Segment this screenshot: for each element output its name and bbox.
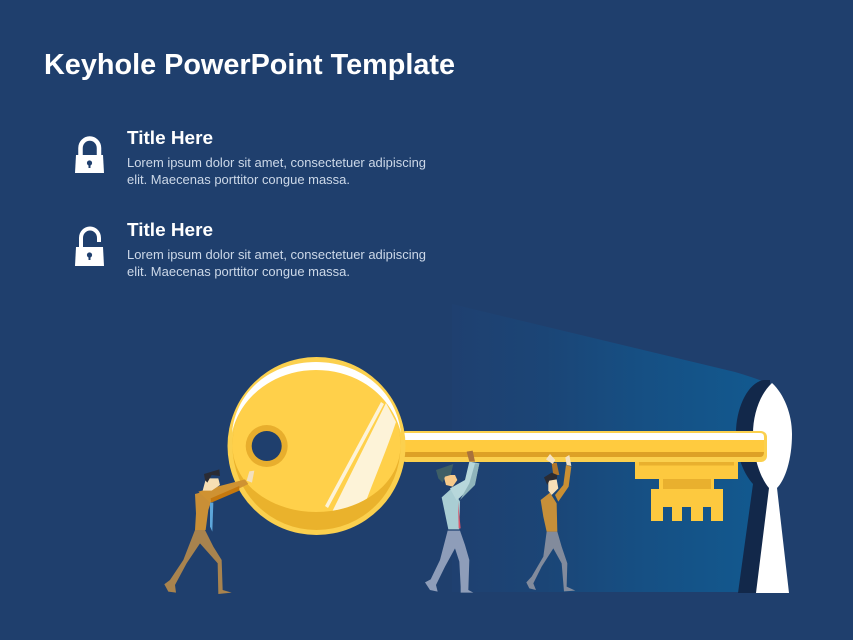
item 2 body text: elit. Maecenas porttitor congue massa. bbox=[127, 265, 350, 279]
key shaft bbox=[400, 431, 767, 462]
item 1 body text bbox=[127, 156, 426, 187]
person lifting the key, right bbox=[526, 454, 575, 591]
key ring hole bbox=[246, 425, 288, 467]
item 2 heading: Title Here bbox=[127, 220, 213, 240]
item 1: locked bbox=[75, 128, 426, 187]
keyhole bbox=[736, 380, 792, 593]
item 1 body text: elit. Maecenas porttitor congue massa. bbox=[127, 173, 350, 187]
item 2: unlocked bbox=[75, 220, 426, 279]
person pushing the key head bbox=[164, 469, 254, 594]
title: Keyhole PowerPoint Template bbox=[44, 49, 455, 81]
icon: open padlock bbox=[75, 228, 104, 266]
item 2 body text: Lorem ipsum dolor sit amet, consectetuer adipiscing bbox=[127, 248, 426, 262]
keyhole opening bbox=[753, 383, 792, 593]
item 2 body text bbox=[127, 248, 426, 279]
icon: closed padlock bbox=[75, 138, 104, 173]
keyhole shadow bbox=[736, 380, 770, 593]
slide canvas bbox=[46, 53, 792, 594]
key bbox=[228, 357, 767, 535]
person lifting the key, left bbox=[425, 451, 479, 593]
key head bbox=[228, 357, 406, 535]
light beam from keyhole bbox=[452, 304, 762, 592]
item 1 heading: Title Here bbox=[127, 128, 213, 148]
glare stripes bbox=[325, 402, 396, 512]
key bit bbox=[635, 462, 738, 521]
item 1 body text: Lorem ipsum dolor sit amet, consectetuer adipiscing bbox=[127, 156, 426, 170]
